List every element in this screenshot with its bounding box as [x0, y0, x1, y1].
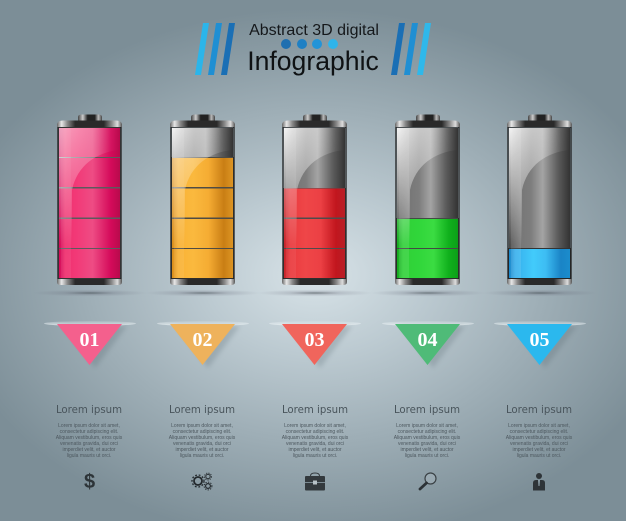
left slashes — [195, 23, 235, 75]
right slashes — [391, 23, 431, 75]
text block 3: Aliquam vestibulum, eros quis — [282, 435, 349, 441]
icon: magnifier — [420, 473, 436, 489]
marker 03: 03 — [304, 329, 324, 351]
text block 2: Lorem ipsum — [169, 405, 235, 416]
text block 5: imperdiet velit, et auctor — [512, 447, 566, 453]
text block 5: ligula mauris ut orci. — [517, 453, 561, 459]
text block 1: Lorem ipsum — [56, 405, 122, 416]
marker 03 — [269, 321, 361, 368]
icon: dollar: $ — [84, 471, 95, 493]
marker 04: 04 — [418, 329, 438, 351]
text block 3: Lorem ipsum dolor sit amet, — [284, 423, 346, 429]
text block 1 — [56, 405, 123, 459]
text block 1: Aliquam vestibulum, eros quis — [56, 435, 123, 441]
text block 4: imperdiet velit, et auctor — [400, 447, 454, 453]
marker 05: 05 — [530, 329, 550, 351]
text block 5: venenatis gravida, dui orci — [510, 441, 568, 447]
title — [195, 22, 431, 76]
dots — [281, 39, 338, 49]
marker 04 — [382, 321, 474, 368]
text block 4: Lorem ipsum dolor sit amet, — [396, 423, 458, 429]
text block 4: venenatis gravida, dui orci — [398, 441, 456, 447]
text block 5: consectetur adipiscing elit. — [510, 429, 568, 435]
text block 3: imperdiet velit, et auctor — [288, 447, 342, 453]
text block 2: ligula mauris ut orci. — [180, 453, 224, 459]
text block 4: consectetur adipiscing elit. — [398, 429, 456, 435]
text block 2: Aliquam vestibulum, eros quis — [169, 435, 236, 441]
battery 4: green, two cells — [395, 114, 460, 285]
battery 3: red, three cells — [282, 114, 347, 285]
icon: businessman — [533, 473, 545, 490]
marker 01: 01 — [80, 329, 100, 351]
text block 1: imperdiet velit, et auctor — [62, 447, 116, 453]
title line 2: Infographic — [247, 46, 379, 76]
marker 05 — [494, 321, 586, 368]
text block 4: ligula mauris ut orci. — [405, 453, 449, 459]
shelf shadows — [32, 290, 598, 296]
text block 3: consectetur adipiscing elit. — [286, 429, 344, 435]
text block 2 — [169, 405, 236, 459]
battery 2: orange, four cells — [170, 114, 235, 285]
text block 4 — [394, 405, 461, 459]
marker 01 — [44, 321, 136, 368]
text block 5: Aliquam vestibulum, eros quis — [506, 435, 573, 441]
text block 1: venenatis gravida, dui orci — [60, 441, 118, 447]
text block 4: Lorem ipsum — [394, 405, 460, 416]
text block 1: Lorem ipsum dolor sit amet, — [58, 423, 120, 429]
text block 3: venenatis gravida, dui orci — [286, 441, 344, 447]
text block 2: consectetur adipiscing elit. — [173, 429, 231, 435]
text block 5: Lorem ipsum — [506, 405, 572, 416]
marker 02 — [157, 321, 249, 368]
text block 5 — [506, 405, 573, 459]
text block 2: venenatis gravida, dui orci — [173, 441, 231, 447]
battery 5: blue, one cell — [507, 114, 572, 285]
text block 3: Lorem ipsum — [282, 405, 348, 416]
text block 3 — [282, 405, 349, 459]
text block 2: imperdiet velit, et auctor — [175, 447, 229, 453]
icon: briefcase — [305, 473, 325, 490]
text block 2: Lorem ipsum dolor sit amet, — [171, 423, 233, 429]
text block 1: consectetur adipiscing elit. — [60, 429, 118, 435]
text block 5: Lorem ipsum dolor sit amet, — [508, 423, 570, 429]
text block 3: ligula mauris ut orci. — [293, 453, 337, 459]
text block 1: ligula mauris ut orci. — [67, 453, 111, 459]
title line 1: Abstract 3D digital — [249, 22, 379, 39]
icon: gears — [192, 473, 212, 490]
marker 02: 02 — [192, 329, 212, 351]
battery 1: pink, five cells — [57, 114, 122, 285]
text block 4: Aliquam vestibulum, eros quis — [394, 435, 461, 441]
